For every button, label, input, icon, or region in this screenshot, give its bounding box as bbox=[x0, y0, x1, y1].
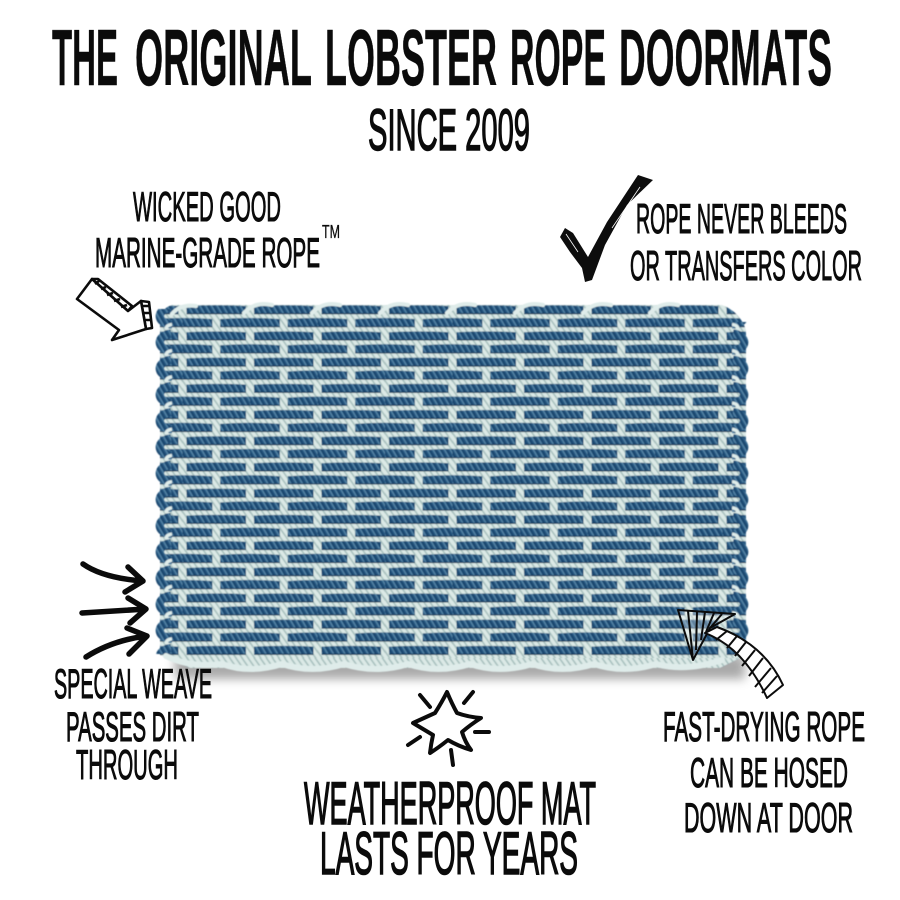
mat shadow bbox=[175, 655, 745, 679]
callout: rope never bleeds bbox=[630, 195, 862, 289]
mat top edge loops bbox=[172, 304, 678, 314]
callout: weatherproof mat bbox=[304, 770, 596, 887]
title bbox=[52, 13, 832, 102]
callout: special weave bbox=[54, 660, 212, 788]
mat weave body bbox=[150, 300, 750, 670]
callout: marine-grade rope: MARINE-GRADE ROPE bbox=[95, 229, 320, 276]
callout: marine-grade rope: TM bbox=[322, 222, 340, 242]
mat right edge loops bbox=[732, 322, 752, 652]
arrow 3 bbox=[86, 628, 147, 657]
title: LOBSTER bbox=[325, 13, 497, 102]
title: ORIGINAL bbox=[135, 13, 312, 102]
infographic canvas: LASTS FOR YEARS bbox=[320, 820, 578, 887]
title: THE bbox=[52, 13, 118, 102]
arrow 1 bbox=[83, 564, 143, 592]
arrow 2 bbox=[82, 598, 146, 623]
mat left edge loops bbox=[152, 309, 172, 654]
callout: marine-grade rope: WICKED GOOD bbox=[133, 183, 281, 230]
panel: rope doormat bbox=[150, 300, 752, 679]
subtitle: SINCE 2009 bbox=[368, 98, 530, 163]
infographic canvas: SPECIAL WEAVE bbox=[54, 660, 212, 707]
icon: three arrows pointing at mat edge bbox=[82, 564, 147, 657]
mat bottom edge loops bbox=[166, 656, 722, 669]
title: ROPE bbox=[510, 13, 606, 102]
callout: special weave: PASSES DIRT bbox=[66, 703, 199, 750]
callout: marine-grade rope bbox=[95, 183, 340, 276]
icon: block arrow bbox=[77, 279, 152, 340]
icon: star with rays bbox=[408, 692, 489, 765]
callout: special weave: THROUGH bbox=[76, 741, 178, 788]
mat rope texture bbox=[150, 300, 752, 670]
icon: hatched arrow bbox=[678, 610, 783, 698]
callout: fast-drying rope bbox=[663, 703, 865, 841]
icon: check mark bbox=[560, 175, 653, 282]
